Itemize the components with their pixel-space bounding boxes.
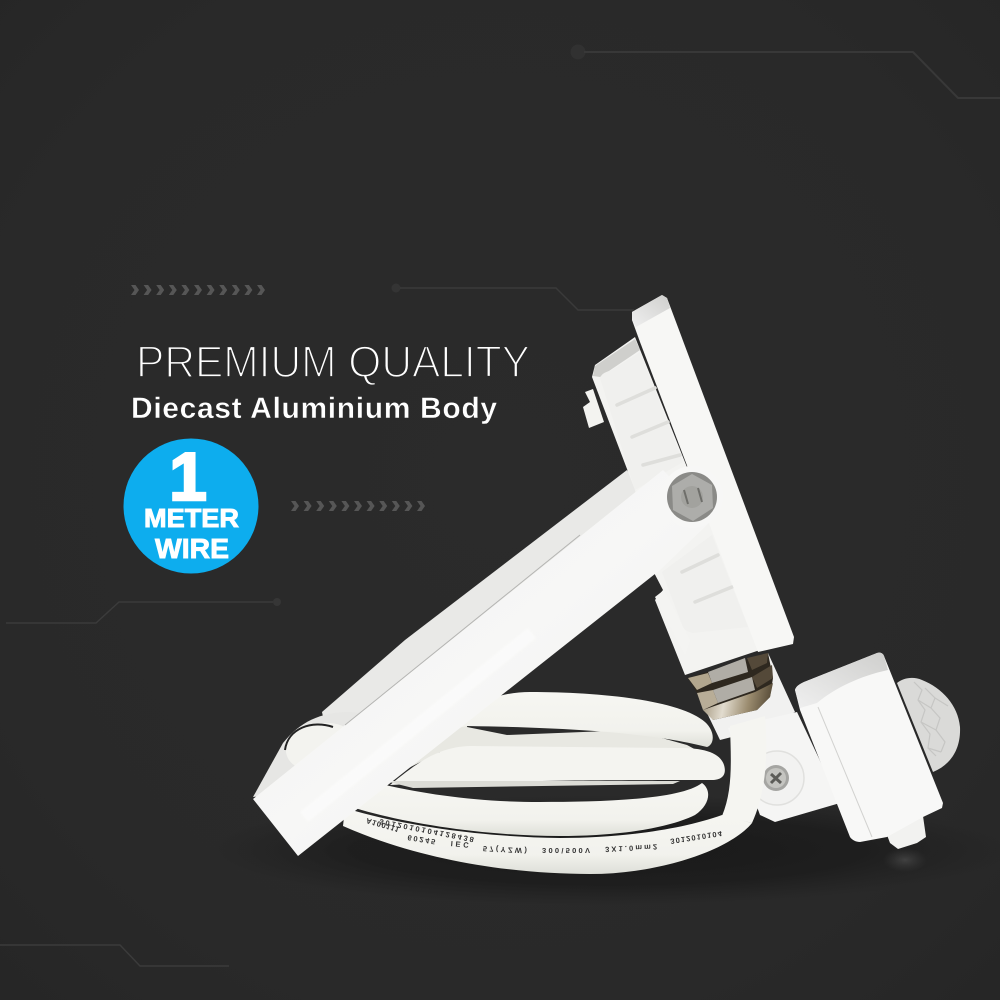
cable print: 3012010104 <box>670 829 723 846</box>
badge: 1 meter wire: METER <box>144 503 239 533</box>
lamp: mounting tab lower <box>655 590 690 655</box>
cable: lower loop <box>355 783 708 836</box>
title: PREMIUM QUALITY <box>136 338 530 387</box>
sensor: box <box>795 653 943 842</box>
gland: lower silver <box>713 677 755 703</box>
sensor: dome <box>897 678 960 772</box>
sensor: box top shade <box>795 653 888 708</box>
cable print: IEC <box>450 839 470 850</box>
lamp: housing top shade <box>593 339 640 377</box>
lamp: mounting tab upper <box>583 389 604 428</box>
cable print <box>365 816 723 855</box>
gland: upper silver <box>708 658 748 683</box>
gland: base <box>688 653 773 720</box>
floor shadow <box>210 795 1000 905</box>
cable: back strip <box>395 712 700 775</box>
circuit line: top right <box>570 44 1000 98</box>
lamp: recessed panel lower <box>662 535 748 633</box>
chevron row: upper <box>131 285 265 295</box>
badge: 1 meter wire: WIRE <box>155 533 229 564</box>
vertical cable <box>722 716 766 823</box>
gland: lower left <box>697 690 718 710</box>
rear arm side band <box>322 470 642 750</box>
gland: upper right <box>747 653 768 670</box>
sensor: seam <box>818 707 872 837</box>
cable print: 60245 <box>407 833 436 846</box>
cable print: A100111 <box>365 816 400 834</box>
circuit line: middle <box>392 284 634 310</box>
PIR sensor <box>795 653 960 849</box>
bracket: screw <box>763 765 789 791</box>
cable: rear coil end <box>286 723 352 768</box>
arm: highlight stripe <box>300 628 536 822</box>
lamp: front plate <box>632 295 794 652</box>
subtitle: Diecast Aluminium Body <box>131 392 497 425</box>
sensor neck <box>707 653 795 740</box>
gland: upper left <box>688 673 712 690</box>
circuit line: left <box>6 598 281 623</box>
badge: 1 meter wire: 1 <box>169 439 207 515</box>
cable print: 3X1.0mm2 <box>605 842 657 854</box>
sensor: button <box>887 816 926 849</box>
lamp: recessed panel upper <box>600 352 683 490</box>
mounting arm <box>253 466 723 856</box>
gland: dome <box>703 683 773 720</box>
lamp: plate top shade <box>632 295 670 327</box>
cable: top loop <box>440 692 713 747</box>
cable: middle loop <box>390 746 725 785</box>
floodlight body <box>583 295 794 675</box>
coiled cable <box>253 692 752 874</box>
chevron row: lower <box>291 501 425 511</box>
cable print: 300\500V <box>542 846 590 855</box>
bracket: washer <box>750 751 804 805</box>
sensor: dome facets <box>914 682 948 756</box>
cable: under strip <box>385 781 680 788</box>
cable: rear end blob <box>253 712 400 797</box>
cable: bottom band <box>343 808 752 874</box>
arm: bolt <box>667 472 717 522</box>
cable gland nuts <box>688 653 773 720</box>
badge: 1 meter wire <box>124 438 258 574</box>
floor reflection <box>883 848 927 872</box>
arm: washer <box>661 466 723 528</box>
cable print: 3012010104128438 <box>379 817 475 844</box>
wire: dark arc <box>285 725 333 750</box>
arm: divider <box>345 535 580 725</box>
arm: main face <box>253 470 712 856</box>
circuit line: bottom left <box>0 945 229 966</box>
sensor bracket <box>728 712 840 822</box>
lamp: rear housing <box>592 337 760 675</box>
gland: lower right <box>752 665 773 688</box>
lamp: fins <box>617 388 732 602</box>
cable print: 57(YZW) <box>483 844 528 855</box>
